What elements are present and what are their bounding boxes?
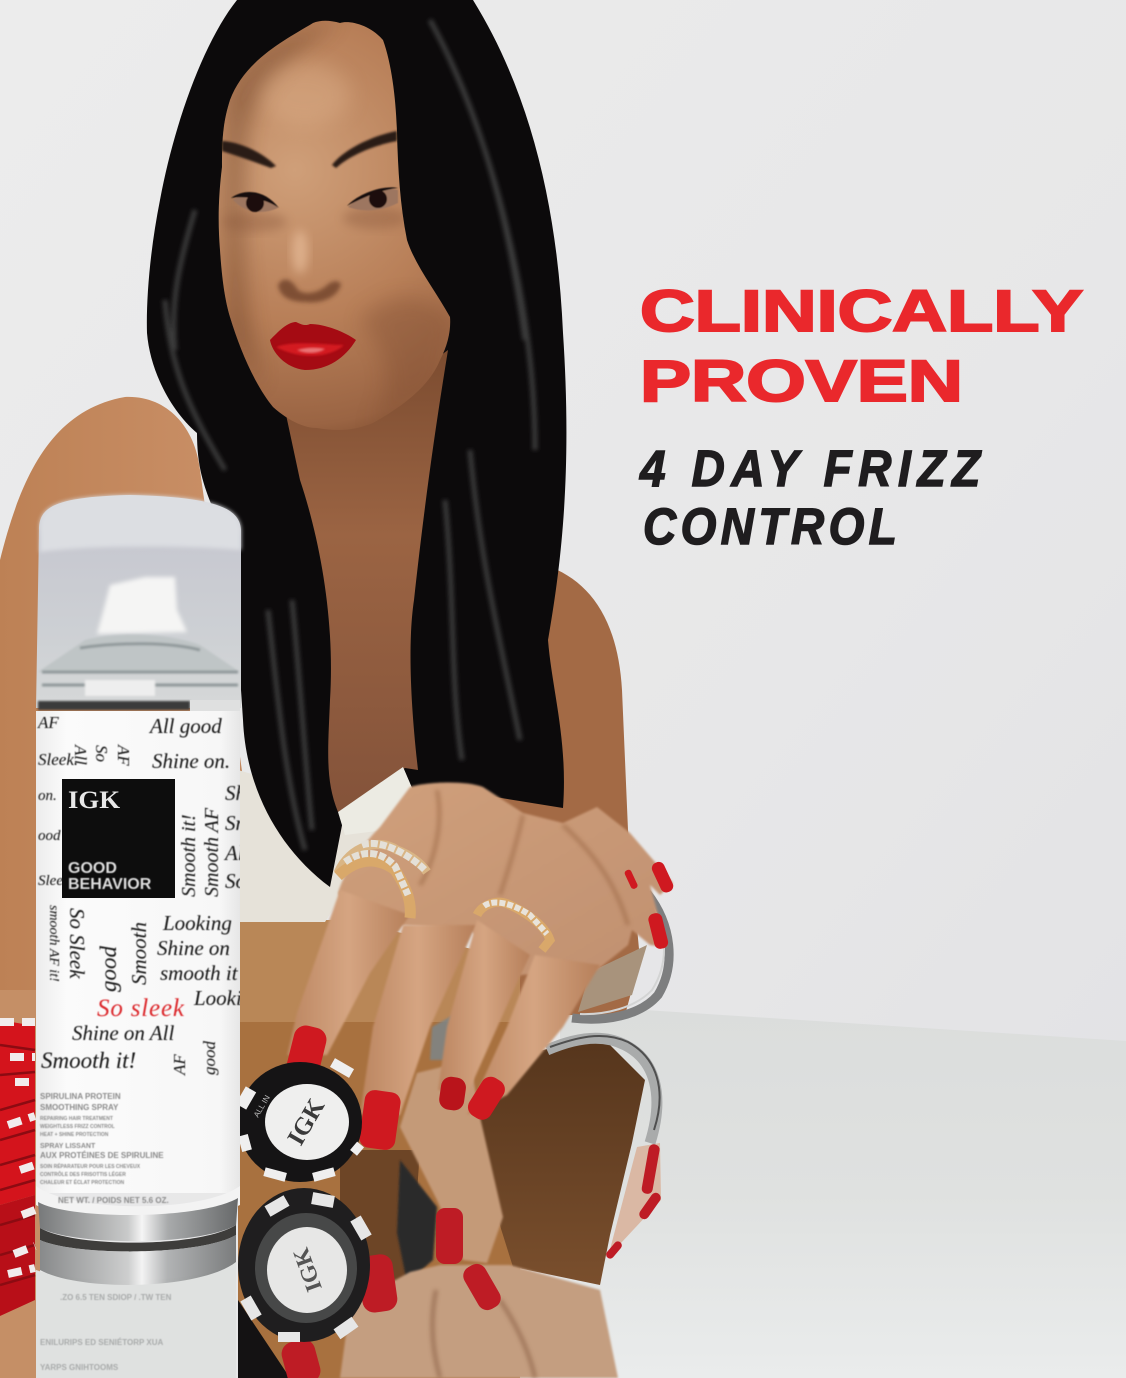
bracelet bbox=[572, 893, 669, 1019]
reflected poker chip: IGK bbox=[288, 1244, 327, 1295]
handwriting: Smooth bbox=[127, 922, 151, 985]
metal base bbox=[38, 1198, 238, 1241]
reflected finger creases bbox=[433, 1290, 535, 1378]
handwriting: good bbox=[96, 946, 121, 992]
product description: SMOOTHING SPRAY bbox=[40, 1103, 119, 1112]
white top strap bbox=[338, 767, 415, 835]
headline: clinically proven: CLINICALLY bbox=[640, 279, 1083, 344]
product description: CONTRÔLE DES FRISOTTIS LÉGER bbox=[40, 1170, 126, 1178]
handwriting: ood bbox=[38, 828, 61, 844]
handwriting: Shine on bbox=[157, 936, 230, 960]
reflected label text: YARPS GNIHTOOMS bbox=[40, 1363, 119, 1372]
product description: CHALEUR ET ÉCLAT PROTECTION bbox=[40, 1178, 124, 1186]
white nozzle bbox=[97, 577, 187, 634]
reflected arm left bbox=[238, 1022, 520, 1378]
product description: AUX PROTÉINES DE SPIRULINE bbox=[40, 1151, 164, 1160]
diamond ring bbox=[477, 902, 550, 950]
product bottle bbox=[36, 495, 263, 1378]
handwriting: Sm bbox=[225, 811, 251, 835]
handwriting: smooth it bbox=[160, 961, 239, 985]
reflected red nails bbox=[279, 1144, 663, 1378]
forearm on table bbox=[238, 920, 520, 1022]
handwriting: AF bbox=[37, 713, 59, 732]
brand name: IGK bbox=[68, 787, 121, 814]
reflected lower hand bbox=[340, 1265, 618, 1378]
handwriting: Sh bbox=[225, 781, 246, 805]
handwriting: Smooth it! bbox=[178, 814, 200, 897]
subheading: 4 day frizz control: 4 DAY FRIZZ bbox=[639, 441, 982, 498]
mirror reflection of body bbox=[238, 1010, 661, 1378]
cap frosted top bbox=[40, 495, 241, 552]
reflected bracelet bbox=[547, 1038, 657, 1143]
reflected label text: ENILURIPS ED SENIÉTORP XUA bbox=[40, 1338, 164, 1347]
handwriting: So bbox=[225, 869, 246, 893]
index finger bbox=[287, 890, 410, 1055]
handwriting: Smooth AF bbox=[201, 807, 223, 897]
forehead highlight bbox=[260, 63, 350, 127]
product description: SOIN RÉPARATEUR POUR LES CHEVEUX bbox=[40, 1162, 141, 1170]
little finger bbox=[467, 955, 600, 1115]
reflected label text: .ZO 6.5 TEN SDIOP / .TW TEN bbox=[60, 1293, 172, 1302]
mirrored table surface bbox=[560, 1010, 1126, 1378]
handwriting: Shine on All bbox=[72, 1021, 174, 1045]
handwriting: AF bbox=[114, 744, 133, 766]
product description: SPRAY LISSANT bbox=[40, 1143, 96, 1150]
label bbox=[36, 711, 240, 1193]
under-eye shadow bbox=[223, 212, 287, 232]
handwriting: Looking bbox=[162, 911, 232, 935]
shadow behind hand bbox=[340, 1150, 420, 1290]
handwriting: Smooth it! bbox=[41, 1048, 136, 1073]
handwriting: AF bbox=[170, 1054, 189, 1076]
product name: GOOD bbox=[68, 860, 117, 877]
reflection metal band bbox=[40, 1235, 236, 1285]
red poker chip stack bbox=[0, 1020, 35, 1316]
chip edge text: ALL IN bbox=[252, 1093, 272, 1119]
subheading: 4 day frizz control bbox=[639, 441, 982, 556]
reflected finger bbox=[400, 1060, 503, 1263]
neck and chest bbox=[285, 350, 448, 812]
headline: clinically proven: PROVEN bbox=[640, 349, 963, 414]
facial shading bbox=[223, 20, 455, 430]
chip brand text: IGK bbox=[283, 1094, 331, 1150]
left shoulder and arm bbox=[0, 397, 320, 990]
handwriting: Sleek. bbox=[38, 750, 78, 769]
knuckle shading bbox=[420, 790, 628, 925]
handwriting: Looking bbox=[193, 986, 263, 1010]
eyes bbox=[231, 187, 398, 212]
handwriting: So bbox=[92, 745, 111, 762]
dark body reflection bbox=[470, 1035, 645, 1285]
model figure bbox=[0, 0, 640, 1022]
product description: HEAT + SHINE PROTECTION bbox=[40, 1132, 109, 1138]
base rim shadow bbox=[40, 1225, 236, 1251]
handwriting: Shine on. bbox=[152, 749, 230, 773]
product description: WEIGHTLESS FRIZZ CONTROL bbox=[40, 1124, 115, 1130]
nose highlight bbox=[292, 230, 308, 274]
skin reflection on left of mirror bbox=[0, 990, 40, 1378]
handwriting bbox=[36, 716, 240, 1076]
wrist in shade bbox=[578, 945, 647, 1012]
handwriting: All good bbox=[148, 714, 222, 738]
back of hand bbox=[338, 782, 673, 975]
red handwriting: So sleek bbox=[97, 995, 185, 1022]
dark neck band bbox=[38, 701, 190, 710]
product name: BEHAVIOR bbox=[68, 876, 152, 893]
reflected hair bbox=[397, 1160, 437, 1283]
reflection silver gap bbox=[430, 1010, 462, 1060]
poker chip bbox=[236, 1058, 364, 1182]
handwriting: good bbox=[200, 1040, 219, 1075]
hair mass bbox=[147, 0, 566, 887]
subheading: 4 day frizz control: CONTROL bbox=[643, 499, 897, 556]
reflected poker chip bbox=[238, 1188, 372, 1342]
hair sheen bbox=[165, 20, 535, 850]
hand with rings and nails bbox=[279, 782, 675, 1378]
right shoulder and arm bbox=[480, 565, 640, 1015]
stacked diamond rings bbox=[338, 843, 427, 918]
product description: SPIRULINA PROTEIN bbox=[40, 1092, 121, 1101]
translucent cap bbox=[36, 495, 241, 708]
middle finger bbox=[360, 925, 476, 1115]
black logo square bbox=[62, 779, 175, 898]
product description: REPAIRING HAIR TREATMENT bbox=[40, 1116, 113, 1122]
label lower curve bbox=[36, 1186, 240, 1220]
white top bbox=[238, 770, 412, 922]
handwriting: smooth AF it! bbox=[46, 905, 61, 982]
nose base shadow bbox=[278, 280, 341, 302]
lip gloss bbox=[276, 343, 344, 356]
handwriting: Sleek. bbox=[38, 873, 73, 889]
metal shoulder rings bbox=[38, 635, 240, 696]
eyebrows bbox=[222, 131, 397, 168]
face bbox=[219, 21, 450, 430]
red lips bbox=[270, 322, 356, 370]
hairline shadow bbox=[225, 20, 340, 390]
bottle reflection bbox=[36, 1262, 236, 1378]
headline: clinically proven bbox=[640, 279, 1083, 414]
cheek shadow bbox=[364, 295, 450, 407]
handwriting: So Sleek bbox=[65, 908, 89, 979]
handwriting: All bbox=[71, 744, 90, 765]
ring finger bbox=[438, 920, 530, 1095]
net weight: NET WT. / POIDS NET 5.6 OZ. bbox=[58, 1196, 169, 1205]
handwriting: All bbox=[223, 841, 250, 865]
red nails bbox=[283, 860, 675, 1151]
handwriting: on. bbox=[38, 788, 57, 804]
reflected pinky bbox=[608, 1143, 661, 1257]
